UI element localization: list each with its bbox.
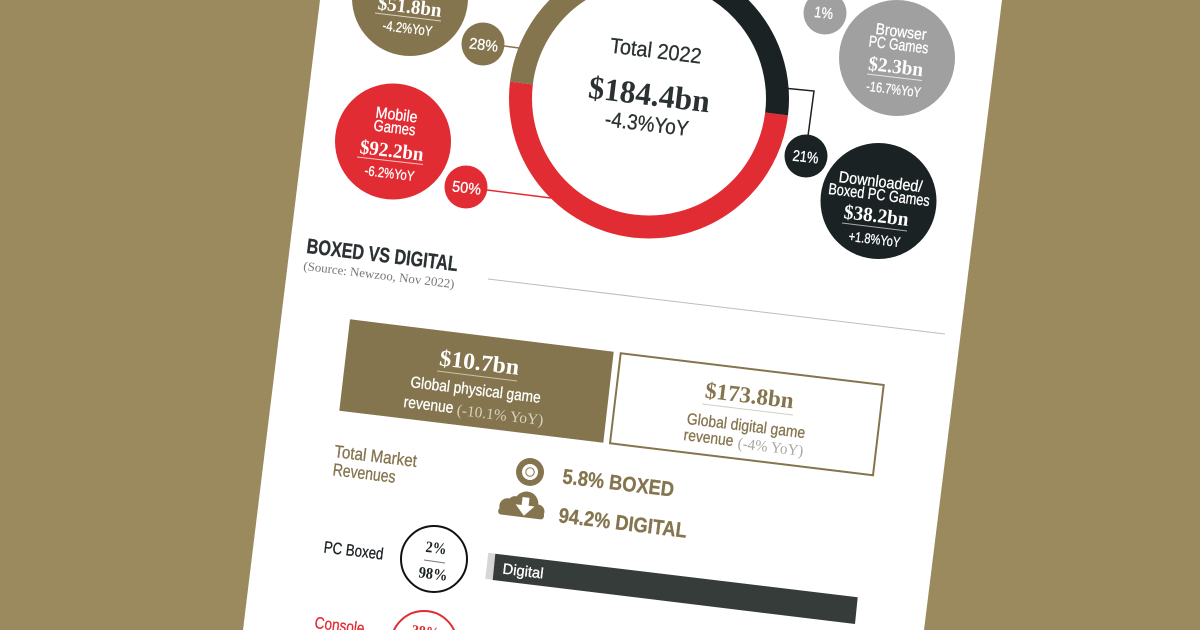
stat: boxed and digital shares: 94.2% DIGITAL [557,504,688,543]
panel: global digital game revenue [610,353,884,475]
bubble: mobile games: Games [373,118,416,139]
bubble: downloaded/boxed PC games: Boxed PC Games [827,181,931,210]
callout: 21% [784,88,828,178]
row: PC boxed [323,526,467,592]
bubble: downloaded/boxed PC games: +1.8%YoY [848,228,902,250]
stat: boxed and digital shares [557,465,688,543]
donut centre text: Total 2022 [609,34,703,68]
row: console boxed [314,611,457,630]
white page [243,0,1002,630]
bubble: downloaded/boxed PC games [820,143,936,259]
callout: 50% [444,166,551,208]
bubble: browser PC games: $2.3bn [867,53,924,81]
bubble: mobile games: Mobile [375,105,418,127]
bubble: browser PC games [839,0,955,116]
bubble: mobile games: -6.2%YoY [364,162,416,184]
panel: global digital game revenue: (-4% YoY) [737,435,804,460]
icon: disc [516,458,544,486]
heading: boxed vs digital: (Source: Newzoo, Nov 2022) [303,259,455,291]
panel: global digital game revenue: Global digital game [686,411,806,442]
icon: cloud download [498,488,547,520]
donut centre text: $184.4bn [587,69,712,119]
panel: global physical game revenue: $10.7bn [438,345,521,380]
callout: 28% [462,22,519,66]
donut chart: total 2022 [520,0,778,227]
bubble: mobile games [335,84,451,200]
panel: global digital game revenue: revenue [683,427,734,450]
donut centre text: -4.3%YoY [604,107,690,141]
donut centre text [587,34,712,141]
callout: 1% [804,0,846,34]
panel: global physical game revenue: revenue [403,394,454,417]
panel: global physical game revenue: (-10.1% YoY) [456,402,544,429]
heading: boxed vs digital [303,235,459,291]
bubble: browser PC games: -16.7%YoY [865,78,922,100]
label: total market revenues: Revenues [332,459,397,487]
row: PC boxed: PC Boxed [323,538,384,564]
ring segment: PC 21% [664,0,778,114]
bar: PC boxed vs digital: Digital [502,561,544,582]
panel: global physical game revenue: Global physical game [409,374,542,407]
bar: PC boxed vs digital [485,553,858,624]
bubble: downloaded/boxed PC games: $38.2bn [843,201,910,231]
bubble: downloaded/boxed PC games: Downloaded/ [838,169,924,196]
row: PC boxed: 98% [418,564,448,585]
callout: 28%: 28% [468,35,499,56]
bubble: mobile games: $92.2bn [359,136,425,166]
ring segment: mobile 50% [520,83,777,227]
bubble: browser PC games: Browser [875,21,928,44]
row: PC boxed: 2% [425,539,447,558]
stat: boxed and digital shares: 5.8% BOXED [561,465,675,502]
panel: global digital game revenue: $173.8bn [704,378,795,413]
callout: 50%: 50% [451,178,482,199]
bubble: browser PC games: PC Games [868,33,929,58]
bubble: console games: -4.2%YoY [382,17,434,39]
callout: 21%: 21% [792,148,820,168]
label: total market revenues [332,441,418,487]
panel: global physical game revenue [339,319,614,443]
bubble: console games [352,0,468,56]
callout: 1%: 1% [813,4,834,23]
ring segment: console 28% [521,0,664,83]
label: total market revenues: Total Market [333,441,418,471]
heading: boxed vs digital: BOXED VS DIGITAL [305,235,459,276]
